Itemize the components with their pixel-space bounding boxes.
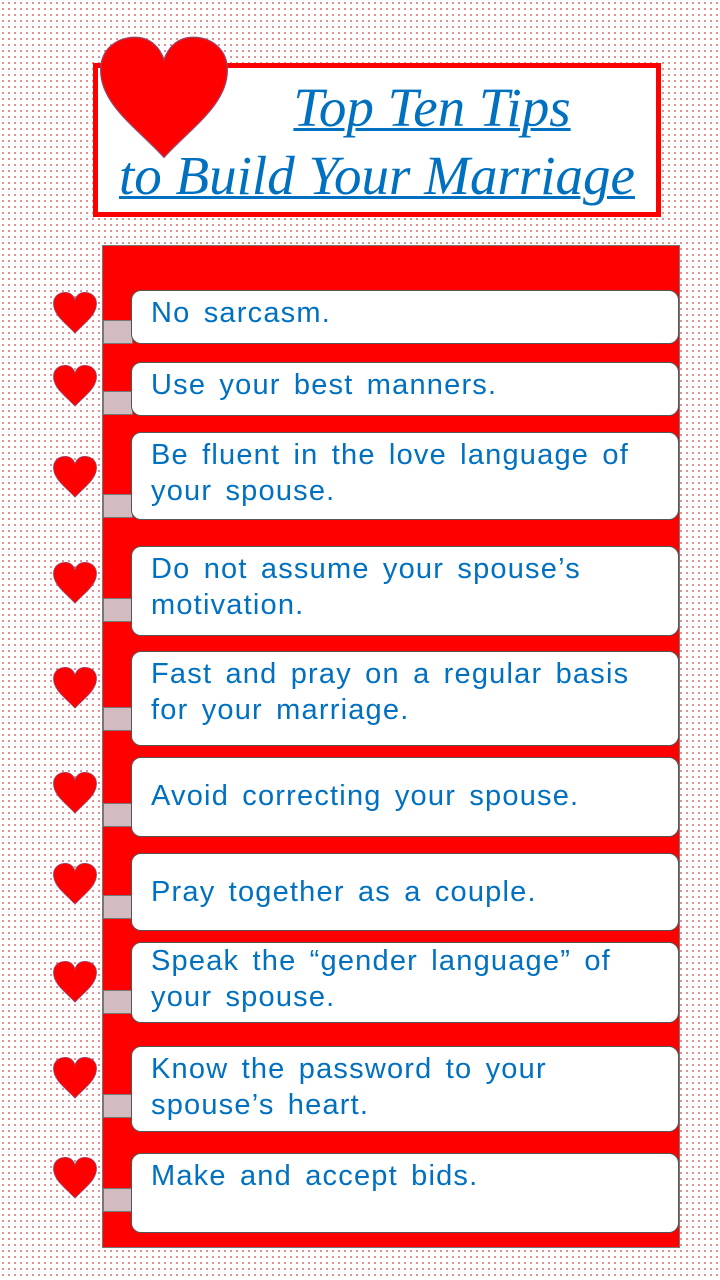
text: No sarcasm.	[151, 297, 331, 329]
text: Know the password to your	[151, 1053, 547, 1085]
text: Do not assume your spouse’s	[151, 553, 581, 585]
panel: red tips panel	[102, 245, 680, 1248]
tip 4	[53, 546, 679, 636]
text: Use your best manners.	[151, 369, 497, 401]
title text: Top Ten Tips	[293, 77, 571, 138]
text: Be fluent in the love language of	[151, 439, 629, 471]
text: spouse’s heart.	[151, 1089, 369, 1121]
title text	[119, 77, 635, 206]
tip 9	[53, 1046, 679, 1132]
tip 7	[53, 853, 679, 931]
tip 3	[53, 432, 679, 520]
tip 10	[53, 1153, 679, 1233]
text: Speak the “gender language” of	[151, 945, 611, 977]
tip 2	[53, 362, 679, 416]
text: Make and accept bids.	[151, 1160, 478, 1192]
text: your spouse.	[151, 981, 335, 1013]
text: Avoid correcting your spouse.	[151, 780, 579, 812]
text: Pray together as a couple.	[151, 876, 537, 908]
tip 6	[53, 757, 679, 837]
text: for your marriage.	[151, 694, 409, 726]
text: Fast and pray on a regular basis	[151, 658, 629, 690]
tip 8	[53, 942, 679, 1023]
text: motivation.	[151, 589, 304, 621]
text: your spouse.	[151, 475, 335, 507]
tip 1	[53, 290, 679, 344]
title box	[93, 63, 661, 217]
tip 5	[53, 651, 679, 746]
title text: to Build Your Marriage	[119, 145, 635, 206]
icon: large heart	[100, 36, 228, 158]
